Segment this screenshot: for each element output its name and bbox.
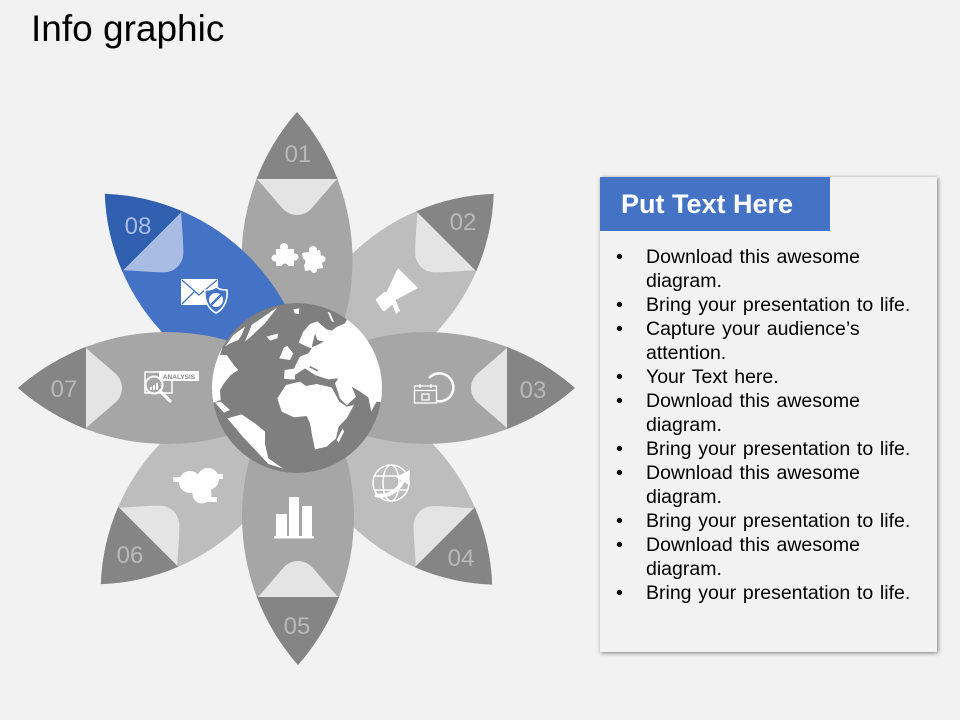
- petal 01: 01: [285, 141, 311, 168]
- bullet list: Download this awesome: [646, 390, 860, 412]
- globe: [212, 303, 382, 473]
- icon: cloud with tags: [173, 468, 223, 504]
- petal 08 highlighted: 08: [125, 213, 151, 240]
- icon: bar chart: [274, 497, 314, 538]
- Greenland: [245, 308, 277, 342]
- Central America and Caribbean: [215, 402, 230, 413]
- icon: puzzle pieces: [272, 243, 326, 273]
- South America: [227, 414, 283, 469]
- panel heading: [600, 177, 830, 231]
- petal 04: [346, 436, 492, 585]
- icon: analysis magnifier: ANALYSIS: [163, 374, 196, 381]
- Black Sea: [309, 366, 318, 371]
- icon: globe with arrow: [373, 465, 410, 501]
- petal 07: 07: [51, 376, 77, 403]
- icon: analysis magnifier: [145, 371, 199, 401]
- petal 05: 05: [284, 613, 310, 640]
- flower diagram: [18, 112, 575, 665]
- icon: megaphone: [378, 268, 418, 314]
- Arctic island: [293, 308, 299, 314]
- petal 08 highlighted: [104, 194, 284, 340]
- petal 07: [18, 332, 227, 444]
- bullet list: [616, 246, 910, 604]
- bullet list: Bring your presentation to life.: [646, 582, 910, 604]
- icon: calendar and dial: [414, 373, 453, 403]
- Eurasia: [284, 320, 382, 412]
- petal 02: [345, 194, 494, 340]
- bullet list: Download this awesome: [646, 462, 860, 484]
- British Isles: [279, 346, 293, 360]
- Baltic Sea: [312, 333, 324, 347]
- bullet list: Bring your presentation to life.: [646, 438, 910, 460]
- bullet list: Bring your presentation to life.: [646, 510, 910, 532]
- petal 03: 03: [520, 377, 546, 404]
- title: Info graphic: [31, 8, 224, 49]
- petal 04: 04: [448, 545, 474, 572]
- bullet list: diagram.: [646, 270, 722, 292]
- petal 01: [242, 112, 352, 318]
- bullet list: diagram.: [646, 486, 722, 508]
- Africa and Arabia: [277, 382, 354, 449]
- Madagascar: [337, 428, 344, 443]
- petal 03: [367, 332, 575, 444]
- bullet list: Capture your audience’s: [646, 318, 860, 340]
- panel heading: Put Text Here: [621, 189, 793, 219]
- Iceland: [267, 333, 278, 341]
- petal 06: [100, 436, 250, 584]
- petal 02: 02: [450, 209, 476, 236]
- icon: envelope with shield: [181, 279, 227, 313]
- Arctic Canada: [225, 327, 245, 347]
- bullet list: Your Text here.: [646, 366, 779, 388]
- bullet list: Bring your presentation to life.: [646, 294, 910, 316]
- Novaya Zemlya: [328, 312, 334, 322]
- bullet list: Download this awesome: [646, 246, 860, 268]
- panel: text box: [600, 177, 937, 652]
- bullet list: diagram.: [646, 558, 722, 580]
- petal 05: [242, 458, 354, 665]
- petal 06: 06: [117, 542, 143, 569]
- North America: [212, 347, 238, 403]
- bullet list: attention.: [646, 342, 726, 364]
- bullet list: Download this awesome: [646, 534, 860, 556]
- bullet list: diagram.: [646, 414, 722, 436]
